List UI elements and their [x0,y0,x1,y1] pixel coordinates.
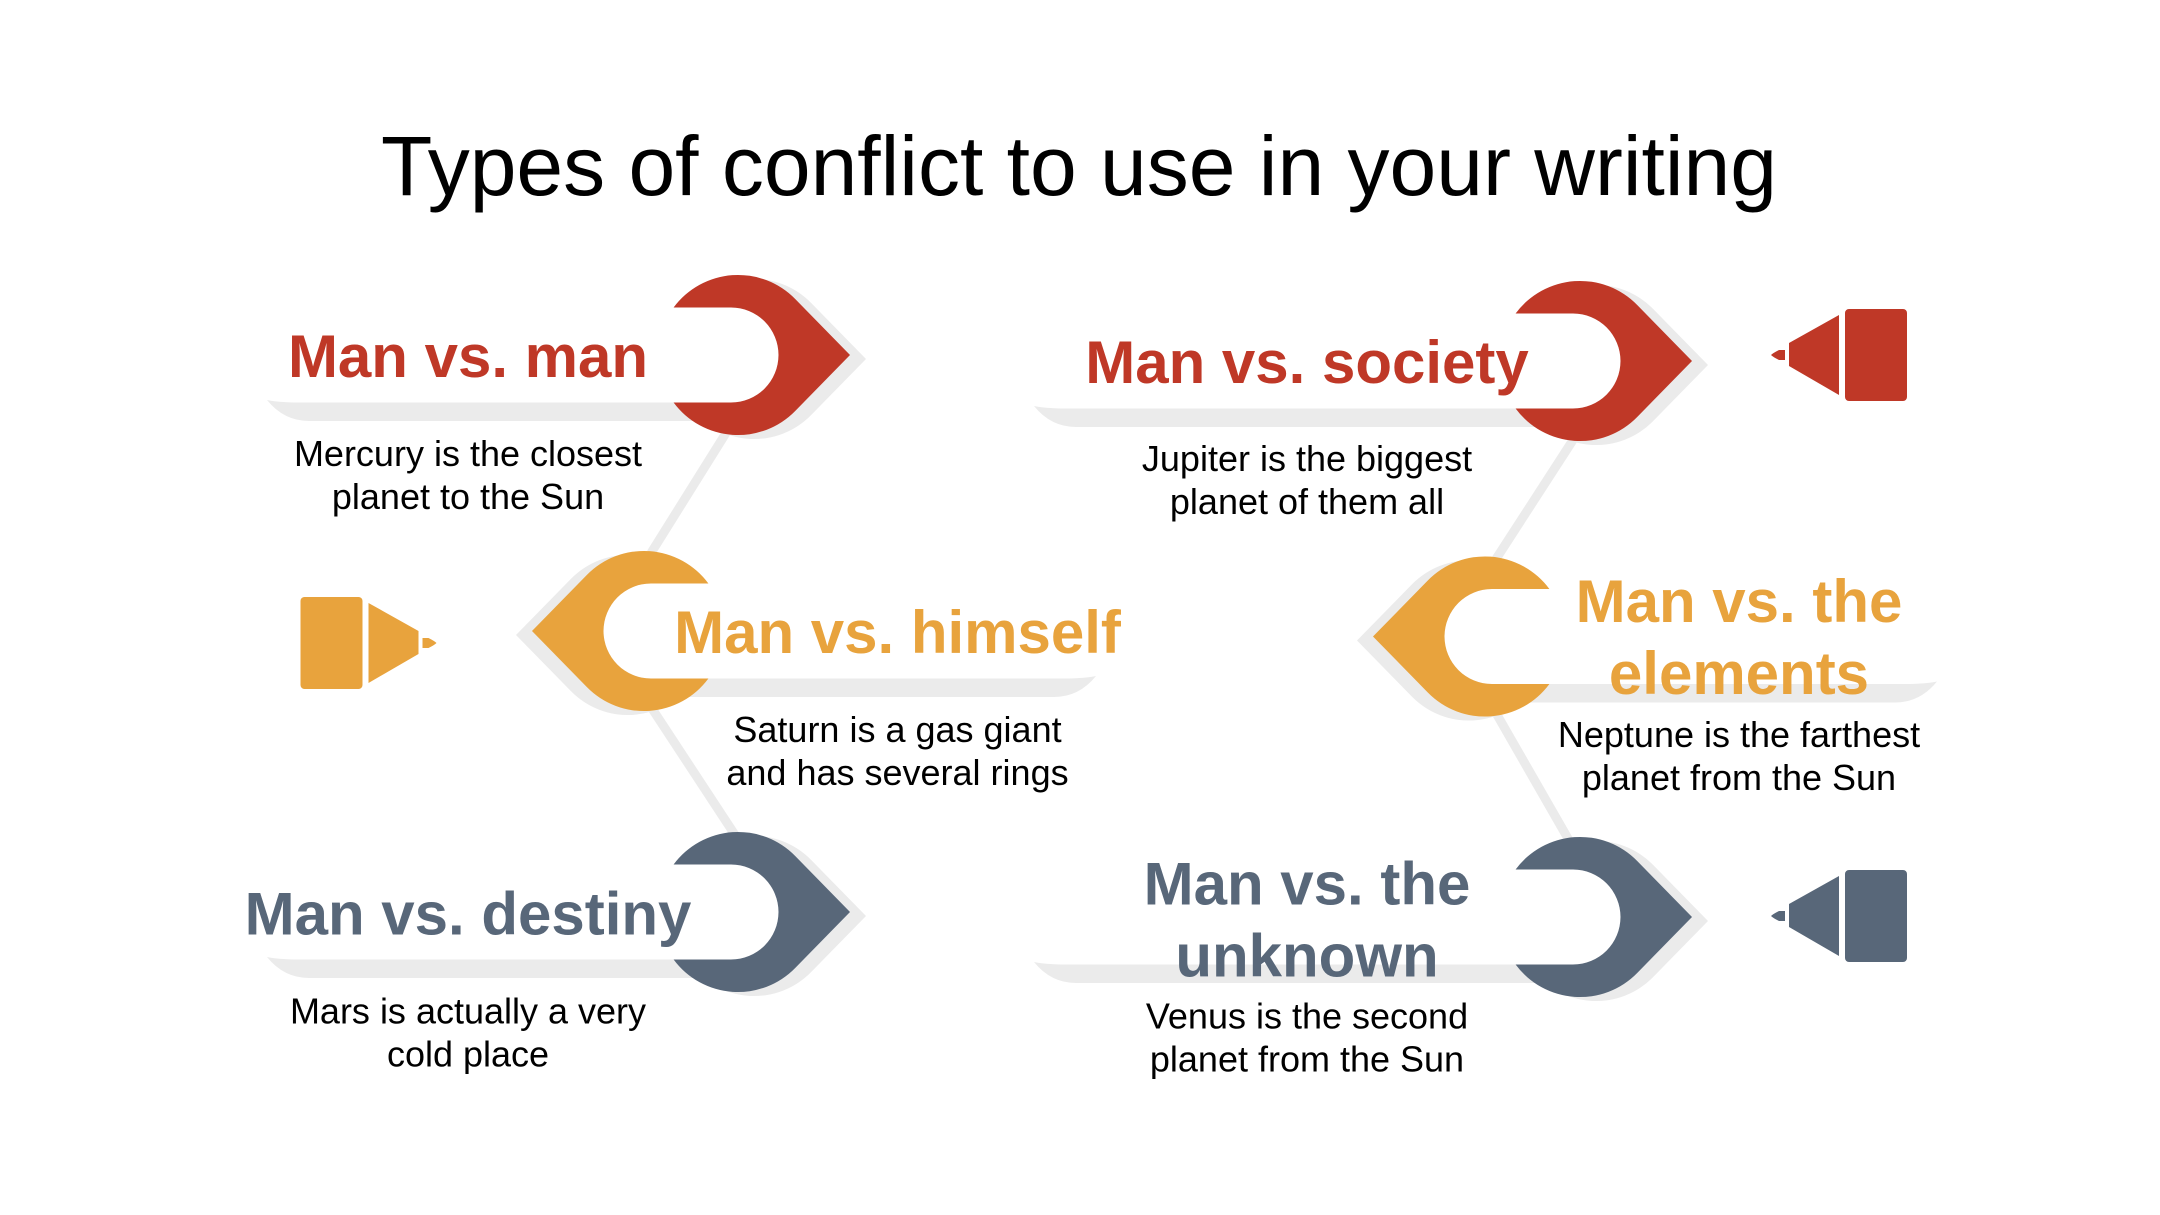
title: Types of conflict to use in your writing [381,119,1777,213]
heading: man vs the elements: elements [1609,640,1869,707]
chevron marker: man vs man [267,275,866,439]
description: venus: planet from the Sun [1150,1038,1464,1080]
heading: man vs destiny: Man vs. destiny [245,880,692,948]
icon: slate marker tip [1771,870,1907,962]
description: mars: Mars is actually a very [290,990,646,1032]
description: neptune: Neptune is the farthest [1558,714,1920,755]
description: mars: cold place [387,1034,549,1074]
description: saturn: and has several rings [726,752,1069,793]
connector lines: right column [1496,440,1573,842]
icon: red marker tip [1771,309,1907,401]
description: mercury: planet to the Sun [332,476,604,517]
description: jupiter: Jupiter is the biggest [1142,438,1472,479]
heading: man vs society: Man vs. society [1085,329,1529,396]
chevron marker: man vs the unknown [1034,837,1708,1001]
description: saturn: Saturn is a gas giant [733,709,1062,750]
heading: man vs himself: Man vs. himself [674,599,1122,666]
heading: man vs the unknown: unknown [1175,922,1439,990]
chevron marker: man vs the elements [1357,556,1937,721]
description: mercury: Mercury is the closest [294,433,642,474]
panel: man vs man [267,275,866,517]
chevron marker: man vs society [1034,281,1708,445]
panel: man vs destiny [245,832,866,1074]
panel: man vs the unknown [1034,837,1907,1080]
connector lines: left column [651,433,737,838]
panel: man vs the elements [1357,556,1937,798]
panel: man vs society [1034,281,1907,522]
chevron marker: man vs destiny [267,832,866,996]
description: venus: Venus is the second [1146,996,1468,1036]
heading: man vs the elements: Man vs. the [1576,568,1902,635]
heading: man vs man: Man vs. man [288,323,648,390]
panel: man vs himself [300,551,1122,793]
heading: man vs the unknown: Man vs. the [1144,850,1470,918]
chevron marker: man vs himself [516,551,1096,715]
icon: orange marker tip [300,597,436,689]
description: neptune: planet from the Sun [1582,757,1896,798]
description: jupiter: planet of them all [1170,481,1444,522]
